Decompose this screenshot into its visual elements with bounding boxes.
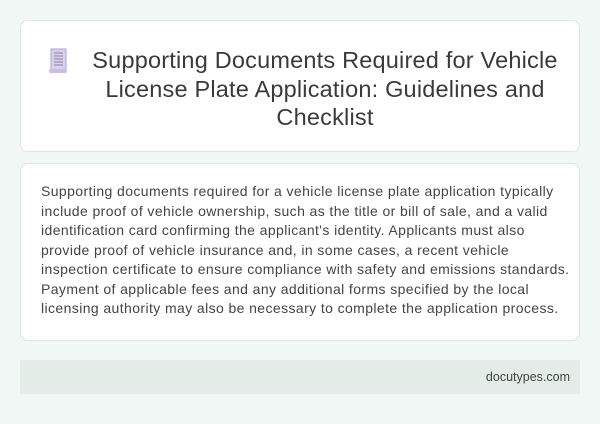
text block: inspection certificate to ensure compliance with safety and emissions standards. [41,261,569,277]
text block: identification card confirming the applicant's identity. Applicants must also [41,222,525,238]
text block [41,183,569,316]
footer [20,360,580,394]
title [92,47,558,130]
panel: title card [20,20,580,152]
text block: licensing authority may also be necessary to complete the application process. [41,300,559,316]
text block: include proof of vehicle ownership, such as the title or bill of sale, and a valid [41,202,548,218]
title: License Plate Application: Guidelines and [105,76,545,102]
title: Checklist [276,104,374,130]
icon: document [49,48,67,73]
text block: Supporting documents required for a vehicle license plate application typically [41,183,554,199]
footer: docutypes.com [486,370,570,384]
text block: Payment of applicable fees and any additional forms specified by the local [41,280,529,296]
title: Supporting Documents Required for Vehicle [92,47,558,73]
text block: provide proof of vehicle insurance and, in some cases, a recent vehicle [41,242,509,258]
panel: description [20,163,580,341]
